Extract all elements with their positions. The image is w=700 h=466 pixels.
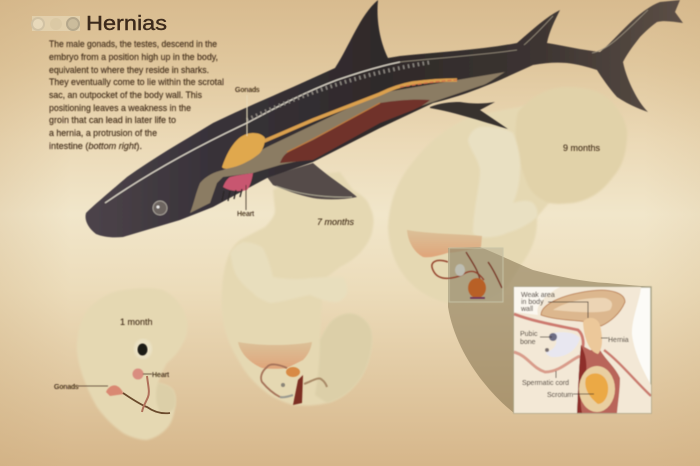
pubic bone <box>546 332 580 357</box>
label: gonads <box>54 384 108 391</box>
label: gonads: Gonads <box>54 384 79 391</box>
icon: shark eye <box>153 201 167 215</box>
callout: weak area in body wall: Weak area <box>521 292 555 299</box>
shark <box>85 0 683 237</box>
callout: hernia: Hernia <box>608 337 629 344</box>
spermatic cord and scrotum <box>577 345 620 413</box>
shark intestine <box>280 100 430 163</box>
shark body <box>85 0 683 237</box>
label: gonads: Gonads <box>235 87 260 94</box>
intro text block: intestine (bottom right). <box>49 141 142 151</box>
fetus: 7 months <box>222 172 374 406</box>
callout: pubic bone <box>520 331 552 346</box>
callout: weak area in body wall <box>520 292 588 318</box>
intro text block <box>49 39 224 151</box>
label: 9 months: 9 months <box>563 143 601 153</box>
body <box>77 288 187 440</box>
callout: pubic bone: bone <box>520 339 536 346</box>
arm <box>468 127 538 237</box>
head <box>516 87 627 204</box>
intro text block: The male gonads, the testes, descend in the <box>49 39 217 49</box>
callout: weak area in body wall: wall <box>520 306 534 313</box>
intro text block: They eventually come to lie within the scrotal <box>49 77 224 87</box>
callout: spermatic cord: Spermatic cord <box>522 380 569 387</box>
hernia sac <box>583 318 602 354</box>
label: heart <box>237 185 254 218</box>
label: heart <box>143 372 169 379</box>
body <box>388 105 560 304</box>
intro text block: a hernia, a protrusion of the <box>49 128 157 138</box>
shark vertebrae <box>247 62 432 120</box>
fetus: 1 month <box>54 288 187 440</box>
label: gonads <box>235 87 260 136</box>
reproductive tract <box>261 364 327 405</box>
icon: eye <box>138 344 148 356</box>
arm <box>230 242 347 303</box>
shark body cavity <box>190 72 505 213</box>
intro text block: equivalent to where they reside in sharks. <box>49 65 209 75</box>
magnification cone <box>448 247 651 413</box>
callout: scrotum: Scrotum <box>547 392 573 399</box>
callout: weak area in body wall: in body <box>521 299 544 306</box>
panel: hernia detail <box>514 287 651 413</box>
leg <box>315 314 372 403</box>
callout: pubic bone: Pubic <box>520 331 538 338</box>
intro text block: positioning leaves a weakness in the <box>49 103 191 113</box>
belly <box>407 230 482 257</box>
shark highlights <box>400 10 648 62</box>
shark rear ventral fin <box>430 102 508 129</box>
blood vessels <box>514 314 583 352</box>
title: Hernias <box>86 13 167 35</box>
intestine <box>541 290 625 326</box>
leg bud <box>156 383 176 413</box>
logo circles <box>32 16 80 31</box>
belly <box>238 342 312 369</box>
label: heart: Heart <box>237 211 254 218</box>
intro text block: sac, an outpocket of the body wall. This <box>49 90 202 100</box>
label: 1 month: 1 month <box>120 317 153 327</box>
intro text block: embryo from a position high up in the body, <box>49 52 218 62</box>
shark pectoral fin <box>267 163 357 199</box>
label: 7 months: 7 months <box>317 217 355 227</box>
fetus: 9 months <box>388 87 627 304</box>
label: heart: Heart <box>152 372 169 379</box>
fetus 9 months reproductive tract <box>432 248 503 302</box>
shark lateral line <box>105 62 400 203</box>
body wall tissue <box>514 287 651 413</box>
body <box>222 172 374 406</box>
shark gonad <box>222 133 265 169</box>
shark heart and gills <box>223 173 253 191</box>
intro text block: groin that can lead in later life to <box>49 115 176 125</box>
shark gonad duct <box>262 80 457 142</box>
